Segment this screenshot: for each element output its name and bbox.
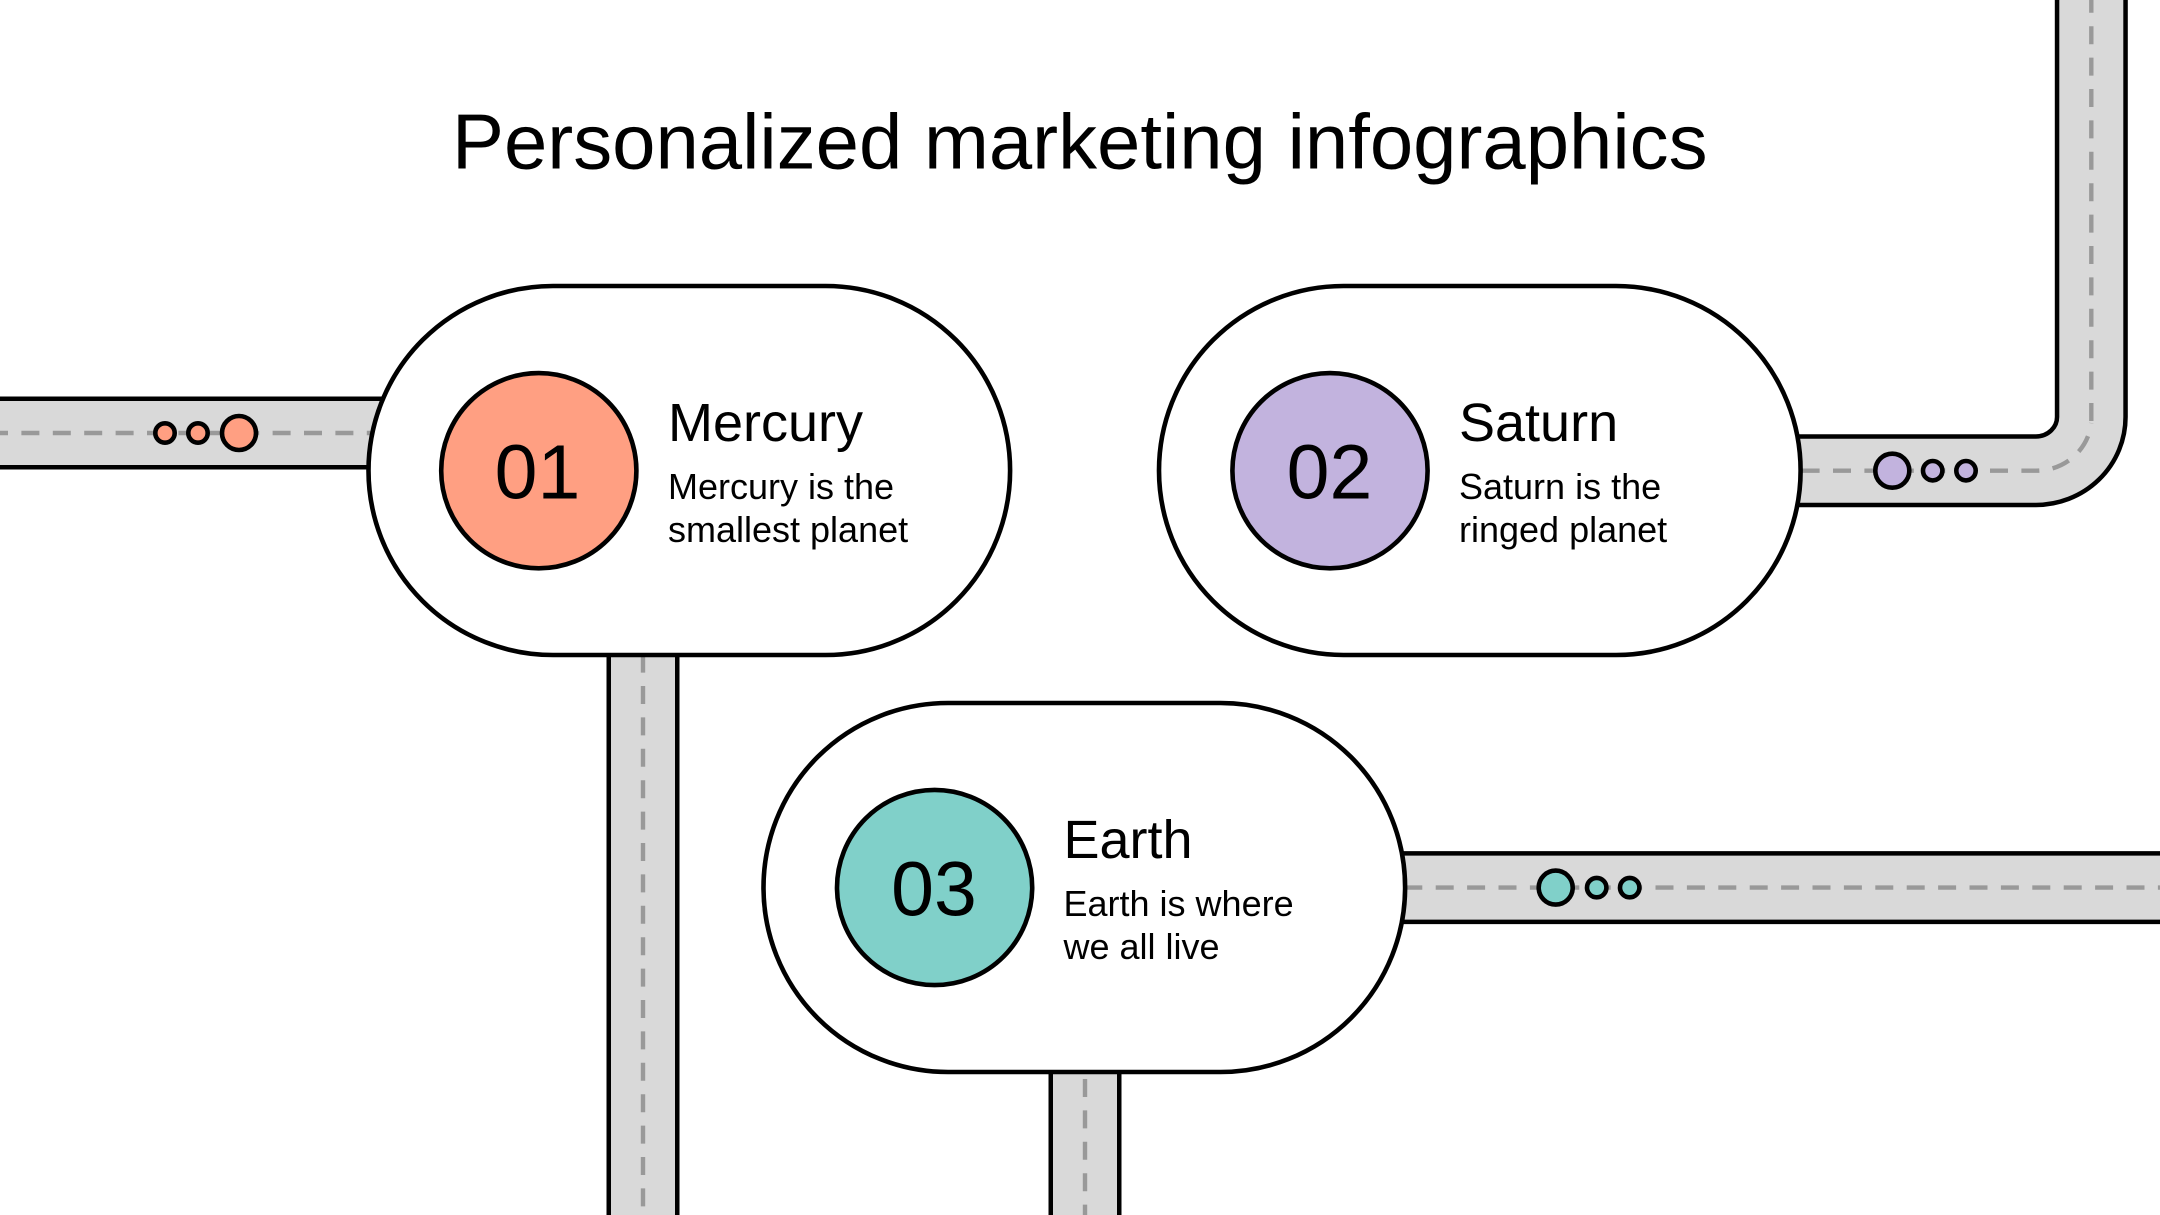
heading: Earth: Earth [1064,810,1193,870]
road: Mercury left [0,416,400,450]
number badge 03 [837,790,1032,985]
road: Mercury down [606,640,680,1215]
number badge 01 [441,373,636,568]
number badge 01: 01 [495,430,580,516]
markers: Saturn road [1875,454,1976,488]
text: Earth description: Earth is where [1064,883,1294,924]
text: Mercury description: smallest planet [668,509,908,550]
title: Personalized marketing infographics [452,98,1708,186]
text: Earth description: we all live [1062,926,1220,967]
heading: Saturn: Saturn [1459,393,1618,453]
road: Saturn to top right [1700,0,2091,488]
markers: Mercury road [155,416,256,450]
number badge 02 [1232,373,1428,568]
panel: Saturn [1159,286,1801,655]
heading: Mercury: Mercury [668,393,863,453]
text: Mercury description: Mercury is the [668,466,894,507]
road: Earth right [1300,871,2160,905]
markers: Earth road [1539,871,1639,905]
road: Earth down [1048,1000,1122,1215]
number badge 03: 03 [891,846,977,932]
number badge 02: 02 [1287,430,1372,516]
text: Saturn description: ringed planet [1459,509,1667,550]
panel: Earth [764,703,1405,1072]
panel: Mercury [368,286,1010,655]
text: Saturn description: Saturn is the [1459,466,1661,507]
